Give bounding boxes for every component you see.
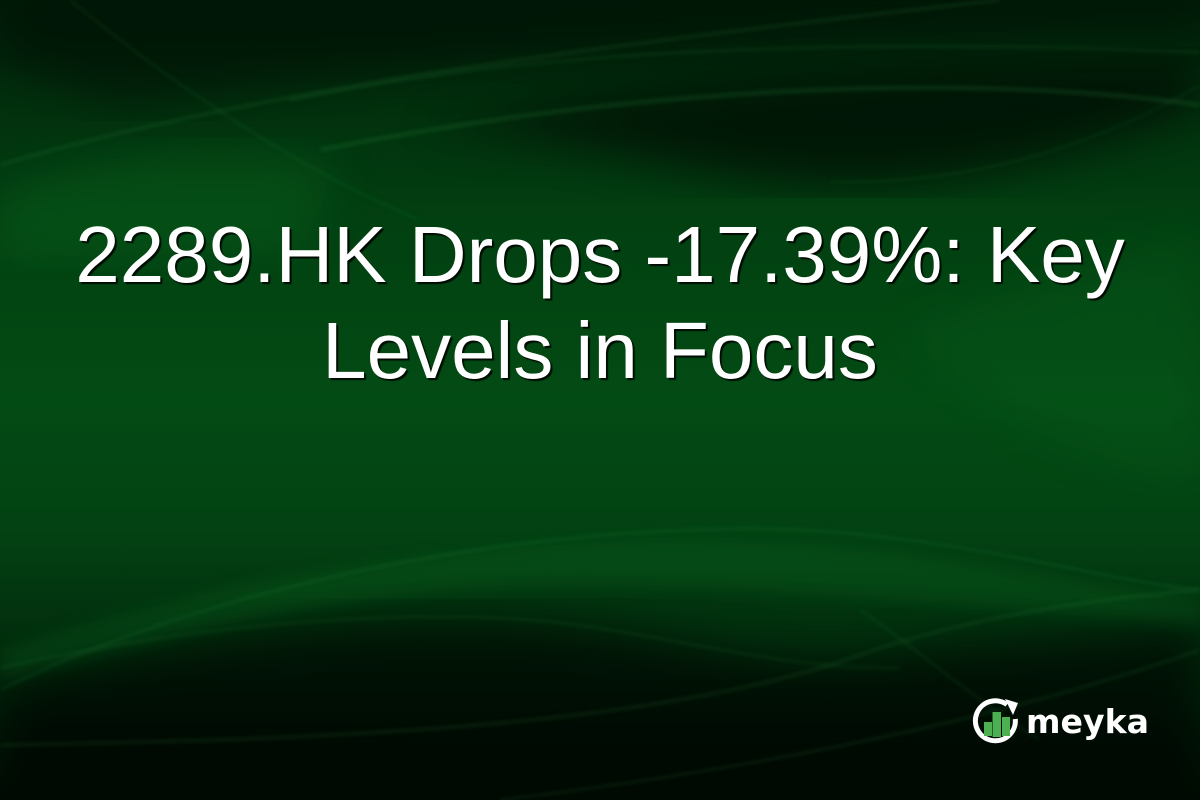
title — [75, 210, 1127, 395]
dark top-right swoosh — [420, 60, 1200, 185]
green glow right — [900, 230, 1200, 480]
wordmark: meyka — [1026, 702, 1149, 741]
green glow left — [0, 148, 340, 260]
dark top band — [0, 0, 1200, 110]
title: Levels in Focus — [322, 306, 878, 395]
dark bottom swoosh — [0, 617, 1200, 800]
green glow lower band — [0, 542, 1200, 680]
icon: circular arrow with bars — [975, 699, 1018, 741]
logo: meyka — [972, 698, 1149, 744]
title: 2289.HK Drops -17.39%: Key — [75, 210, 1125, 299]
